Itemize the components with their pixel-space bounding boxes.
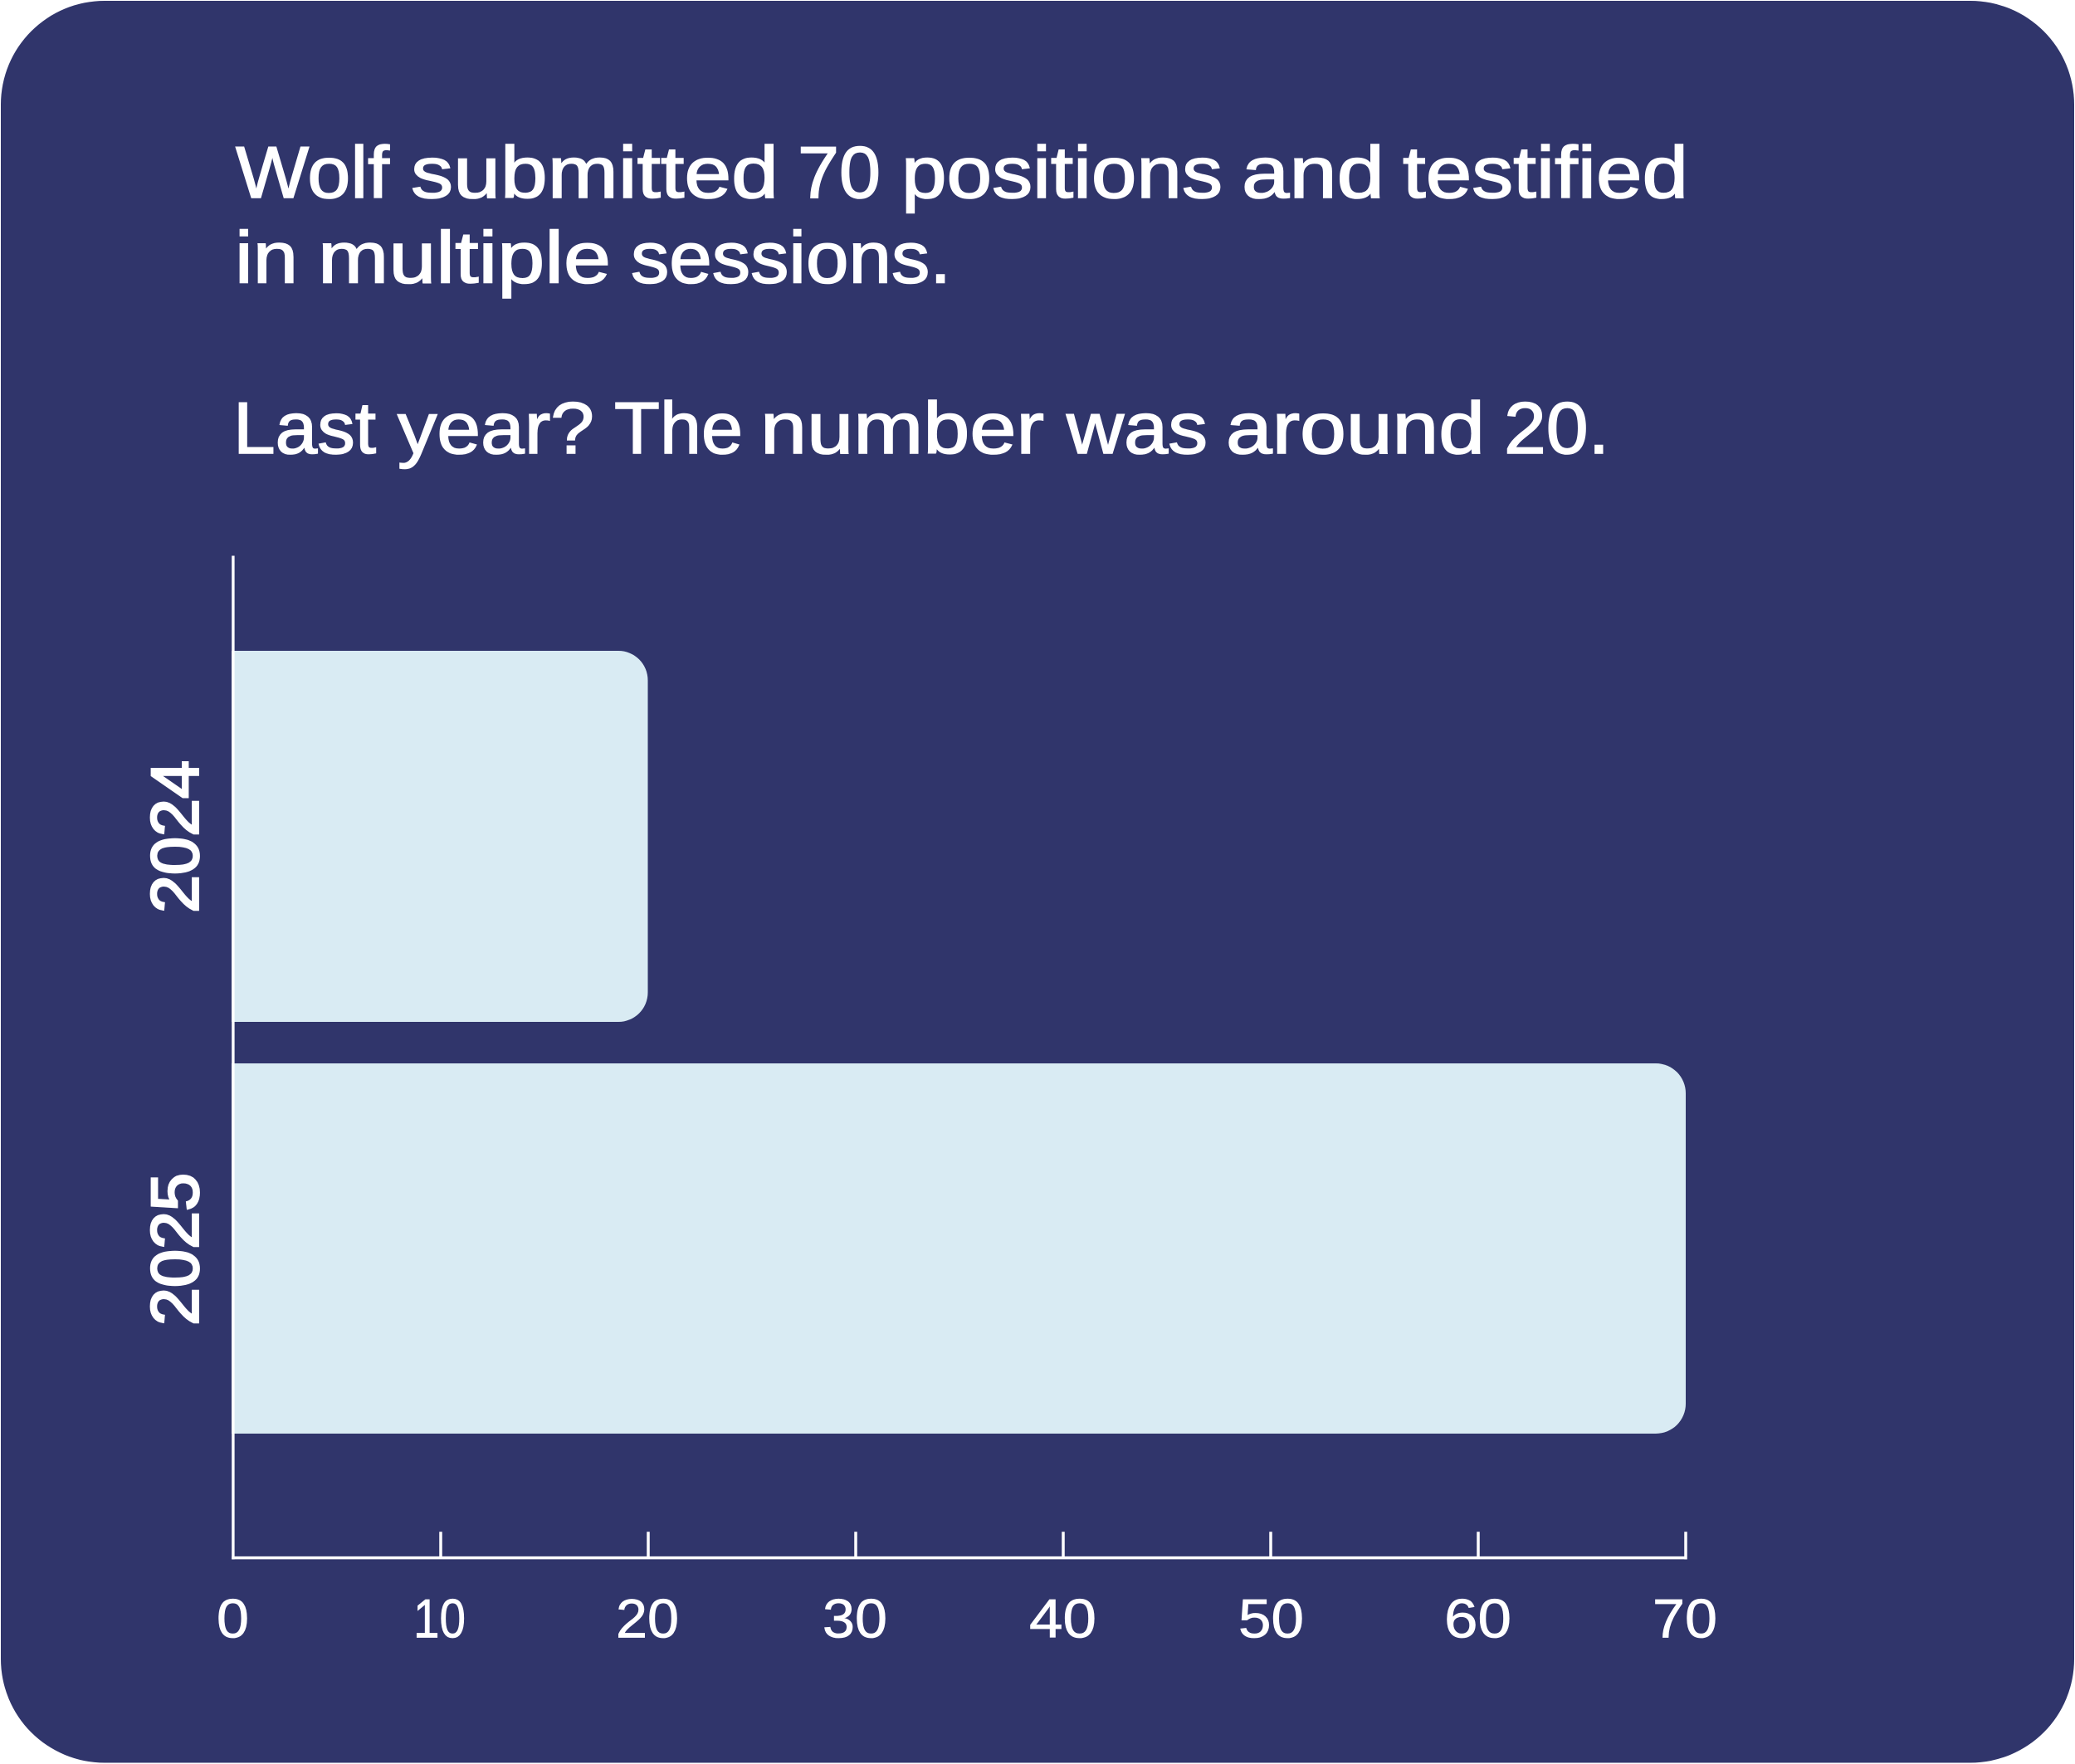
heading: positions submitted statement: number — [760, 387, 1044, 469]
heading: positions submitted statement: testified — [1403, 131, 1688, 213]
heading: positions submitted statement: 70 — [798, 131, 881, 213]
heading: positions submitted statement: year? — [398, 387, 594, 469]
bar: 2024 value 20 — [232, 651, 647, 1022]
heading: positions submitted statement: The — [614, 387, 743, 469]
heading: positions submitted statement: positions — [901, 131, 1223, 213]
x axis tick labels: 40 — [1029, 1587, 1096, 1649]
heading: positions submitted statement: 20. — [1504, 387, 1609, 469]
heading: positions submitted statement: in — [235, 216, 298, 299]
heading: positions submitted statement: Wolf — [236, 131, 390, 213]
heading: positions submitted statement: was — [1066, 387, 1208, 469]
heading: positions submitted statement: submitted — [411, 131, 779, 213]
heading: positions submitted statement: Last — [233, 387, 376, 469]
x axis tick labels: 70 — [1653, 1587, 1717, 1649]
x axis tick labels: 10 — [413, 1587, 466, 1649]
x axis tick labels: 50 — [1238, 1587, 1304, 1649]
x axis tick labels: 60 — [1444, 1587, 1511, 1649]
y axis label: 2024: 2024 — [138, 760, 212, 913]
x axis line with tick marks — [232, 1532, 1687, 1559]
heading: positions submitted statement — [233, 131, 1688, 469]
bar: 2025 value 70 — [232, 1063, 1686, 1434]
x axis tick labels: 0 — [217, 1587, 249, 1649]
heading: positions submitted statement: around — [1226, 387, 1485, 469]
x axis tick labels — [217, 1587, 1717, 1649]
heading: positions submitted statement: and — [1242, 131, 1384, 213]
heading: positions submitted statement: multiple — [318, 216, 611, 299]
bar chart: positions by year — [138, 556, 1717, 1649]
y axis line — [232, 556, 235, 1559]
x axis tick labels: 30 — [823, 1587, 887, 1649]
y axis label: 2025: 2025 — [138, 1173, 212, 1326]
x axis tick labels: 20 — [616, 1587, 679, 1649]
heading: positions submitted statement: sessions. — [631, 216, 951, 299]
